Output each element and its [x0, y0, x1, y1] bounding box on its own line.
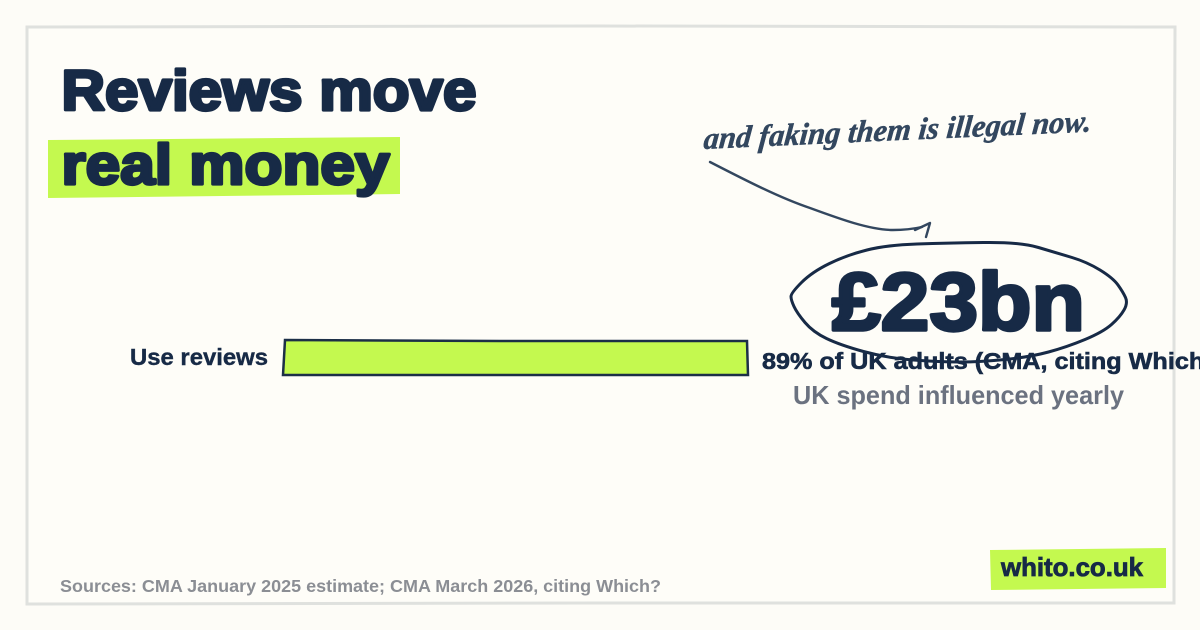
handwritten note: and faking them is illegal now.	[702, 103, 1093, 156]
big stat: £23bn: £23bn	[832, 257, 1085, 348]
hand-drawn circle around stat	[791, 242, 1126, 362]
bar label: Use reviews	[130, 344, 268, 370]
bar chart: use reviews	[130, 340, 1200, 375]
title	[48, 59, 476, 198]
title line: Reviews move: Reviews move	[62, 59, 476, 123]
arrow: note to figure	[710, 162, 930, 237]
sources: Sources: CMA January 2025 estimate; CMA March 2026, citing Which?	[60, 576, 661, 596]
title highlight: real money: real money	[62, 133, 390, 197]
badge: whito.co.uk	[990, 548, 1166, 590]
bar value: 89% of UK adults (CMA, citing Which?)	[762, 348, 1200, 374]
bar	[283, 340, 748, 375]
stat caption: UK spend influenced yearly	[793, 380, 1125, 410]
badge: whito.co.uk: whito.co.uk	[1000, 552, 1144, 582]
